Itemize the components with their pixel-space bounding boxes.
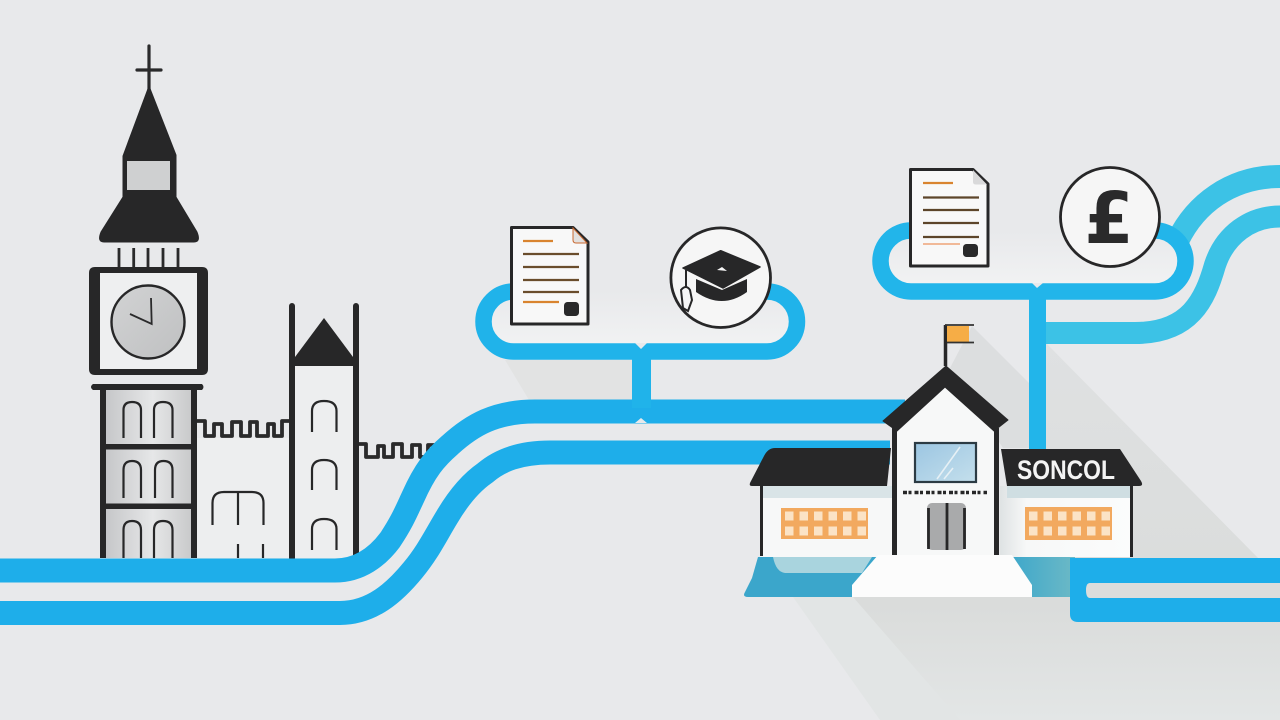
tower posts (292, 306, 356, 558)
landmark: castle wall and tower (197, 306, 440, 558)
flag (945, 325, 974, 342)
document icon (512, 228, 588, 324)
stem (632, 352, 651, 408)
door (927, 503, 966, 550)
route: upper band (0, 412, 905, 570)
right wing (1000, 486, 1133, 557)
graduation cap icon (671, 228, 770, 328)
lower right stream (1040, 216, 1280, 333)
battlement left (197, 421, 289, 436)
flag pole (944, 325, 947, 366)
teal base right (1005, 557, 1075, 597)
pound icon: £ (1084, 177, 1134, 260)
sign text: SONCOL (1017, 455, 1115, 485)
tower roof (295, 318, 353, 366)
loop outline (484, 292, 797, 352)
belfry columns (119, 248, 178, 268)
branch: centre junction (483, 228, 797, 423)
notch (1032, 283, 1043, 288)
gable walls (894, 428, 996, 556)
clock hands (130, 298, 152, 324)
landmark: Big Ben clock tower (89, 46, 208, 558)
steps (852, 555, 1032, 597)
loop outline (880, 230, 1186, 292)
school building (744, 325, 1142, 597)
wall door (212, 492, 264, 558)
top right stream (1178, 176, 1280, 240)
clock face (112, 286, 184, 358)
spire (100, 86, 198, 242)
wall (197, 438, 289, 558)
route: bottom right loop (1070, 558, 1280, 622)
gable small text (903, 491, 987, 494)
right wing roof (1001, 449, 1142, 486)
loop fill (483, 291, 797, 351)
left wing window (781, 508, 868, 539)
belfry window (127, 161, 170, 190)
tower shaft (106, 390, 191, 558)
route: lower band (0, 452, 890, 613)
document icon (910, 170, 988, 266)
branch: right junction (876, 168, 1280, 450)
gable roof (883, 366, 1008, 431)
tower windows (312, 401, 336, 550)
pound icon (1060, 168, 1160, 266)
right wing window (1025, 507, 1112, 540)
left wing (760, 486, 895, 557)
cross (137, 46, 161, 90)
clock box (94, 270, 203, 372)
central gable (893, 385, 999, 556)
teal base left (744, 557, 877, 597)
loop fill (876, 231, 1185, 291)
tower windows (124, 402, 172, 558)
gable window (915, 443, 976, 482)
tower body (295, 360, 353, 558)
notch (635, 343, 647, 423)
stem (1029, 292, 1046, 450)
left wing roof (750, 448, 891, 486)
long shadows (505, 326, 1280, 720)
battlement right (359, 444, 440, 457)
